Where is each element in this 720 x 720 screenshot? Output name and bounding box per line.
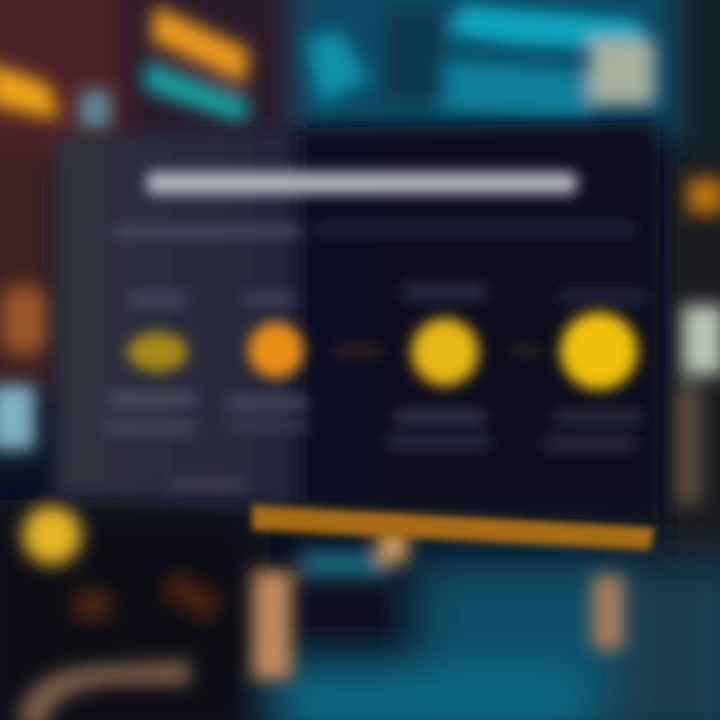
board orange ledge bbox=[252, 505, 655, 550]
step 3 bbox=[388, 284, 488, 448]
background: top scene bbox=[0, 0, 720, 560]
subtitle bbox=[115, 223, 635, 238]
arrow 1 bbox=[335, 345, 380, 357]
panel: dark board bbox=[55, 122, 660, 550]
arrow 2 bbox=[512, 345, 540, 355]
step 4 bbox=[545, 290, 645, 450]
background: bottom scene bbox=[0, 500, 720, 720]
step 2 bbox=[228, 292, 308, 432]
title bbox=[147, 172, 577, 194]
step 1 bbox=[105, 292, 195, 434]
footer note bbox=[170, 478, 245, 490]
